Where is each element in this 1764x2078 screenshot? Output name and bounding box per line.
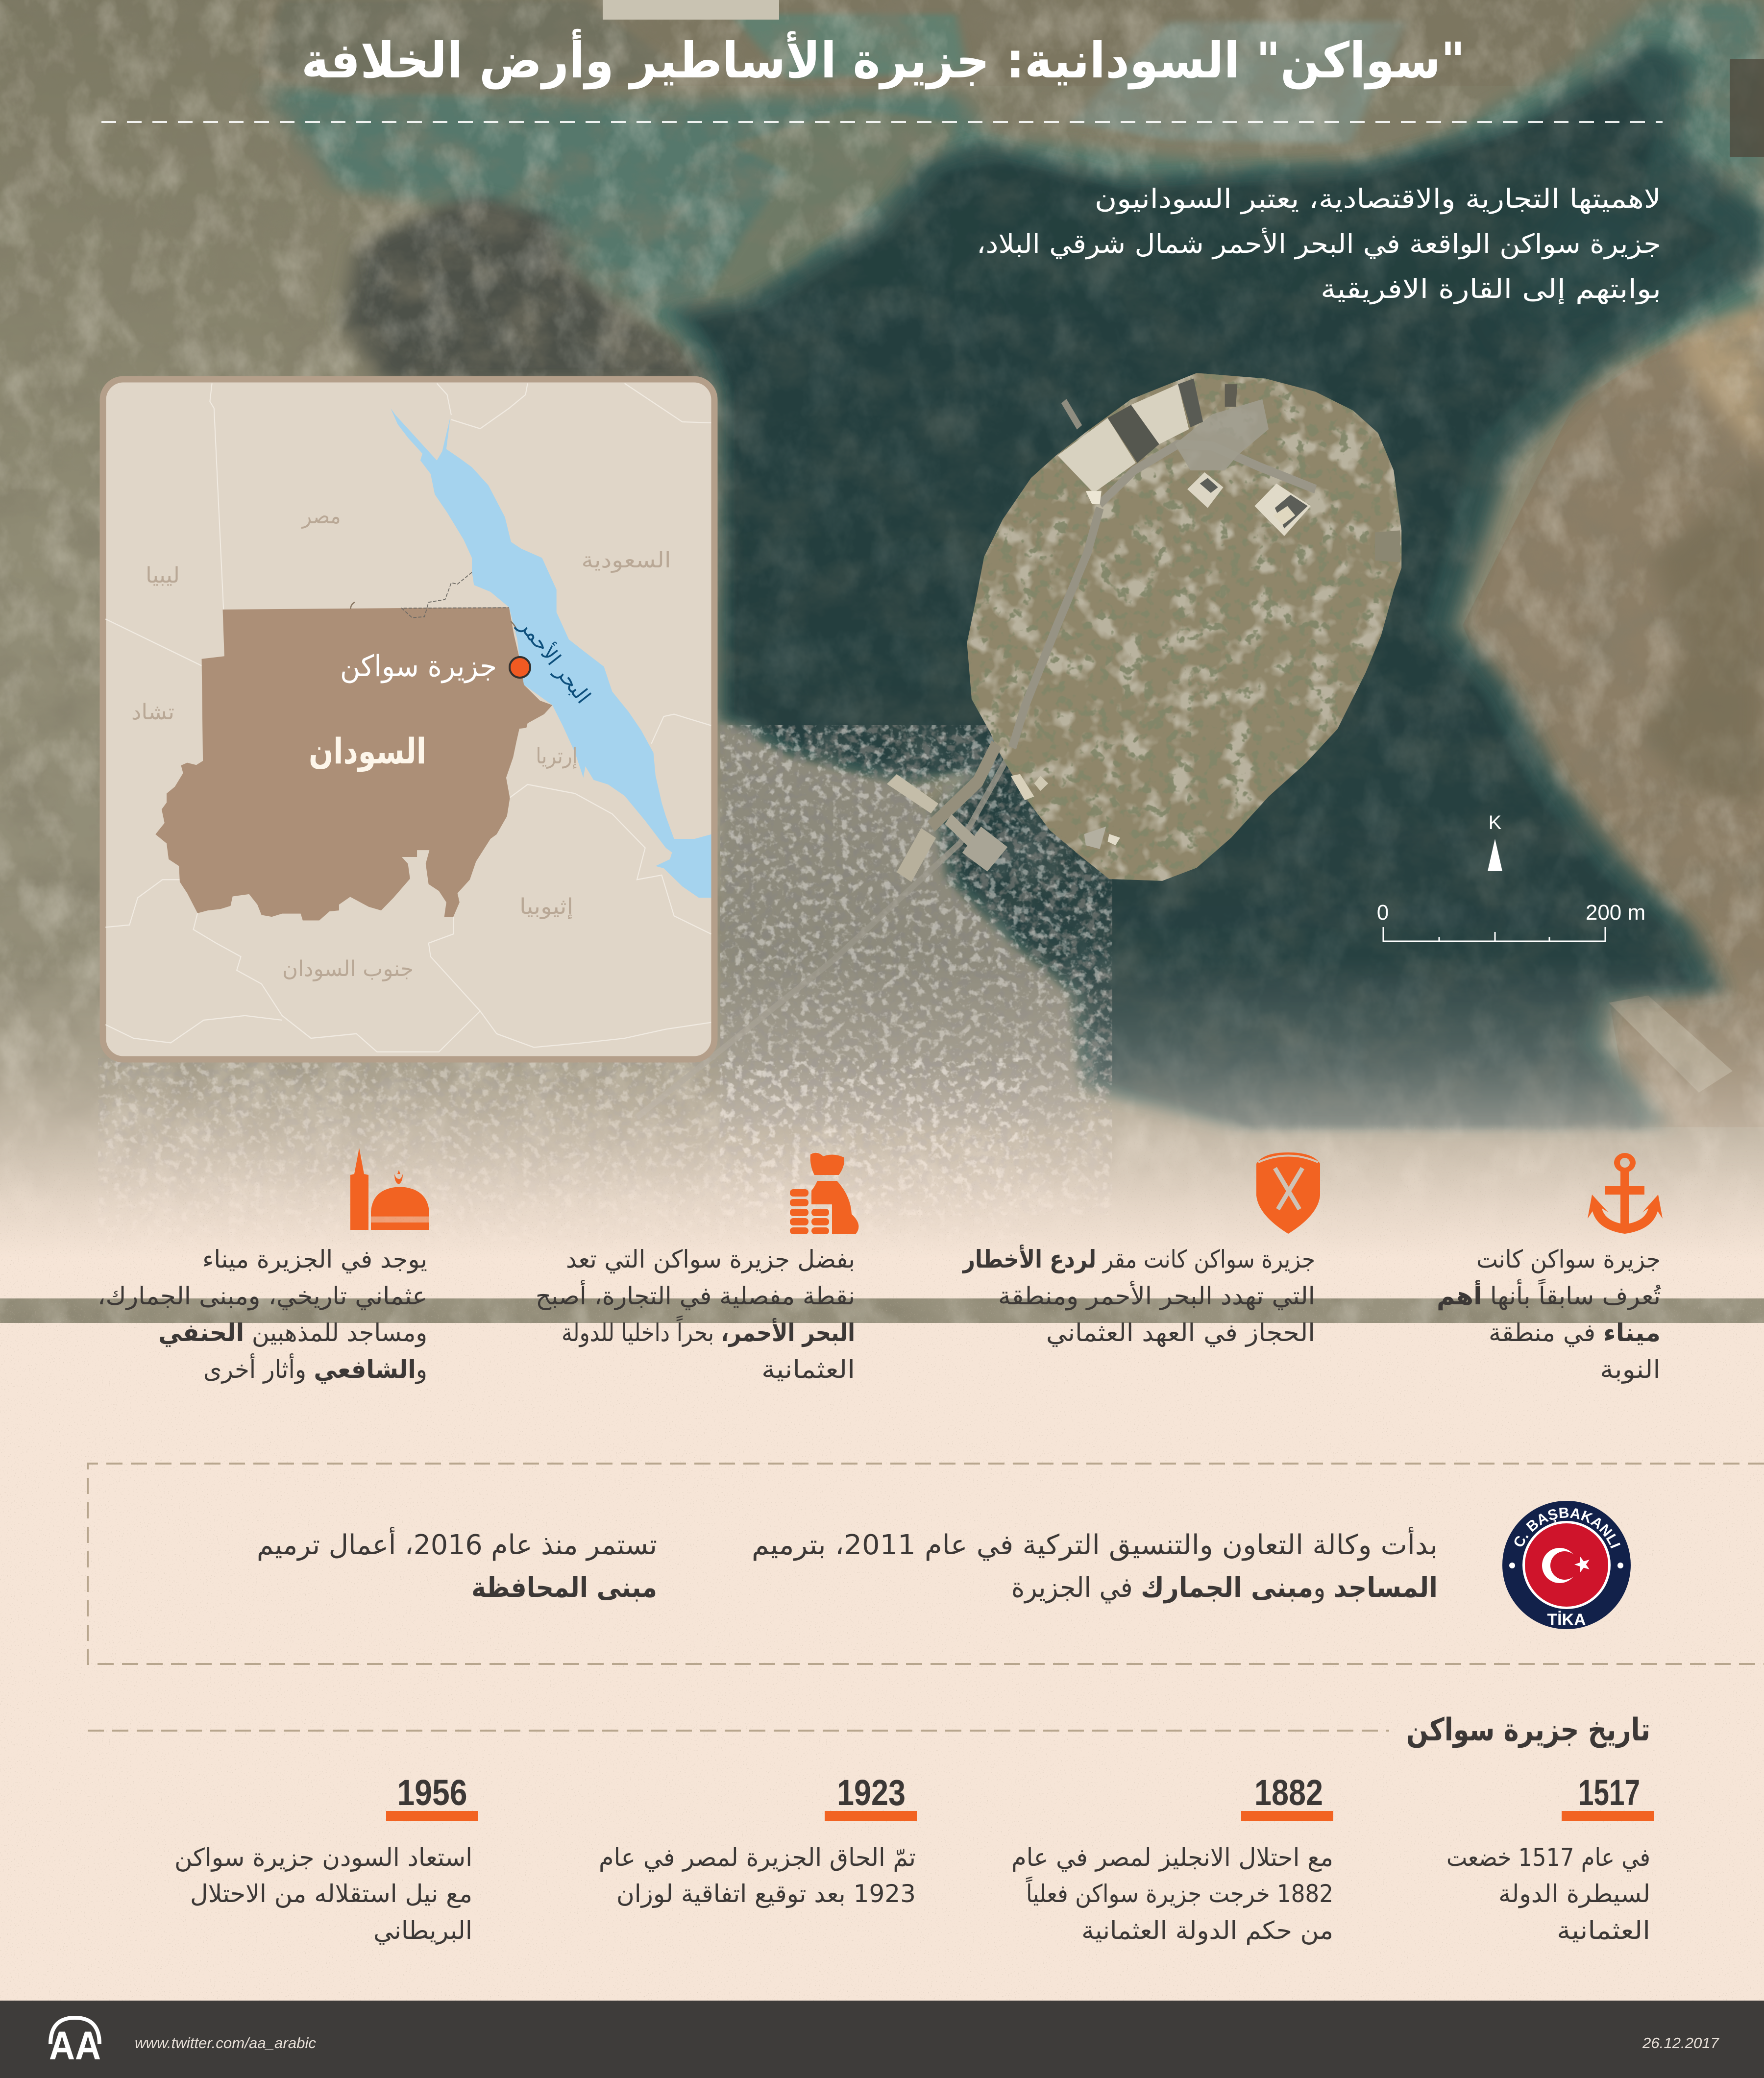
- footer link: www.twitter.com/aa_arabic: [135, 2034, 316, 2052]
- neighbouring country labels: تشاد: [131, 700, 174, 725]
- text: anchor column: تُعرف سابقاً بأنها أهم: [1437, 1278, 1661, 1311]
- timeline: 1923: 1923 بعد توقيع اتفاقية لوزان: [616, 1880, 916, 1908]
- timeline: 1923: 1923: [837, 1772, 906, 1813]
- intro text: [977, 183, 1661, 304]
- timeline: 1882: [1011, 1772, 1333, 1945]
- port, jetty and causeway: [931, 401, 1120, 872]
- north arrow: [1488, 812, 1502, 871]
- text: monuments column: ومساجد للمذهبين الحنفي: [158, 1319, 427, 1347]
- text: monuments column: يوجد في الجزيرة ميناء: [202, 1245, 427, 1273]
- timeline: 1956: البريطاني: [373, 1916, 472, 1945]
- Suakin island: [967, 373, 1401, 881]
- Sudan label: السودان: [309, 731, 426, 772]
- neighbouring country labels: مصر: [301, 504, 341, 529]
- icon: shield with swords: [1256, 1152, 1320, 1234]
- text: shield column: التي تهدد البحر الأحمر ومنطقة: [998, 1281, 1315, 1311]
- text: shield column: الحجاز في العهد العثماني: [1046, 1319, 1315, 1347]
- Suakin marker: [510, 657, 530, 678]
- text: monuments column: والشافعي وأثار أخرى: [203, 1353, 427, 1384]
- text: monuments column: [98, 1245, 427, 1384]
- icon: anchor: [1588, 1153, 1663, 1234]
- Red Sea: [391, 408, 711, 898]
- timeline: 1517: في عام 1517 خضعت: [1446, 1843, 1650, 1872]
- scale bar: 0: [1377, 901, 1389, 925]
- intro text: بوابتهم إلى القارة الافريقية: [1321, 273, 1661, 304]
- neighbouring country labels: [131, 504, 671, 981]
- scale bar: 200 m: [1586, 901, 1645, 925]
- timeline: 1956: 1956: [397, 1772, 467, 1813]
- footer: [0, 2001, 1764, 2078]
- intro text: لاهميتها التجارية والاقتصادية، يعتبر السودانيون: [1095, 183, 1661, 214]
- fade into paper: [0, 955, 1764, 1298]
- timeline: 1517: لسيطرة الدولة: [1498, 1880, 1650, 1908]
- neighbouring country labels: إرتريا: [536, 744, 577, 769]
- panel: location map: [103, 379, 714, 1059]
- satellite image background: [0, 0, 1764, 1323]
- timeline: 1882: 1882: [1254, 1772, 1323, 1813]
- timeline: 1923: [599, 1772, 917, 1908]
- text: trade column: البحر الأحمر، بحراً داخليا للدولة: [562, 1315, 855, 1347]
- title: "سواكن" السودانية: جزيرة الأساطير وأرض الخلافة: [301, 28, 1465, 90]
- Red Sea label: البحر الأحمر: [514, 612, 596, 708]
- text: trade column: العثمانية: [761, 1355, 855, 1384]
- logo: TIKA: [1502, 1501, 1631, 1629]
- logo: TIKA: TİKA: [1547, 1611, 1586, 1629]
- heading: history: تاريخ جزيرة سواكن: [1406, 1712, 1650, 1748]
- timeline: 1956: استعاد السودن جزيرة سواكن: [174, 1843, 472, 1872]
- logo: TIKA: T.C. BAŞBAKANLIK: [1514, 1508, 1620, 1548]
- neighbouring country labels: إثيوبيا: [519, 894, 573, 919]
- text: anchor column: جزيرة سواكن كانت: [1476, 1245, 1661, 1273]
- intro text: جزيرة سواكن الواقعة في البحر الأحمر شمال شرقي البلاد،: [977, 227, 1661, 259]
- text: governorate building restoration: مبنى المحافظة: [471, 1572, 657, 1604]
- map borders and seas: [105, 383, 711, 1052]
- timeline: 1956: [174, 1772, 478, 1945]
- text: shield column: جزيرة سواكن كانت مقر لردع الأخطار: [961, 1244, 1315, 1274]
- text: governorate building restoration: [257, 1527, 657, 1604]
- icon: money bag: [790, 1153, 858, 1234]
- text: anchor column: [1437, 1245, 1661, 1384]
- neighbouring country labels: جنوب السودان: [282, 956, 414, 981]
- text: trade column: [536, 1245, 855, 1384]
- text: shield column: [961, 1244, 1315, 1347]
- neighbouring country labels: ليبيا: [146, 563, 180, 588]
- scale bar: [1377, 901, 1645, 941]
- timeline: 1923: تمّ الحاق الجزيرة لمصر في عام: [599, 1843, 916, 1872]
- text: anchor column: النوبة: [1600, 1355, 1661, 1384]
- timeline: 1517: [1446, 1772, 1654, 1945]
- icon: mosque: [350, 1148, 429, 1230]
- timeline: 1882: مع احتلال الانجليز لمصر في عام: [1011, 1843, 1333, 1872]
- timeline: 1882: 1882 خرجت جزيرة سواكن فعلياً: [1026, 1876, 1333, 1908]
- timeline: 1517: العثمانية: [1557, 1916, 1650, 1945]
- footer date: 26.12.2017: [1642, 2034, 1720, 2052]
- text: mosques and customs restoration: [752, 1527, 1438, 1604]
- Suakin label: جزيرة سواكن: [340, 649, 497, 684]
- Sudan: [155, 607, 552, 920]
- paper texture: [0, 1127, 1764, 2004]
- text: governorate building restoration: تستمر منذ عام 2016، أعمال ترميم: [257, 1527, 657, 1561]
- text: mosques and customs restoration: بدأت وكالة التعاون والتنسيق التركية في عام 2011، بترميم: [752, 1527, 1438, 1561]
- timeline: 1882: من حكم الدولة العثمانية: [1081, 1916, 1333, 1945]
- timeline: 1956: مع نيل استقلاله من الاحتلال: [190, 1880, 472, 1908]
- text: monuments column: عثماني تاريخي، ومبنى الجمارك،: [98, 1282, 427, 1311]
- text: trade column: نقطة مفصلية في التجارة، أصبح: [536, 1280, 855, 1311]
- logo: AA: AA: [49, 2024, 101, 2068]
- north arrow: K: [1489, 812, 1502, 833]
- text: trade column: بفضل جزيرة سواكن التي تعد: [566, 1245, 855, 1273]
- text: mosques and customs restoration: المساجد ومبنى الجمارك في الجزيرة: [1011, 1572, 1438, 1604]
- timeline: 1517: 1517: [1578, 1772, 1640, 1813]
- text: anchor column: ميناء في منطقة: [1489, 1319, 1661, 1347]
- neighbouring country labels: السعودية: [581, 548, 671, 573]
